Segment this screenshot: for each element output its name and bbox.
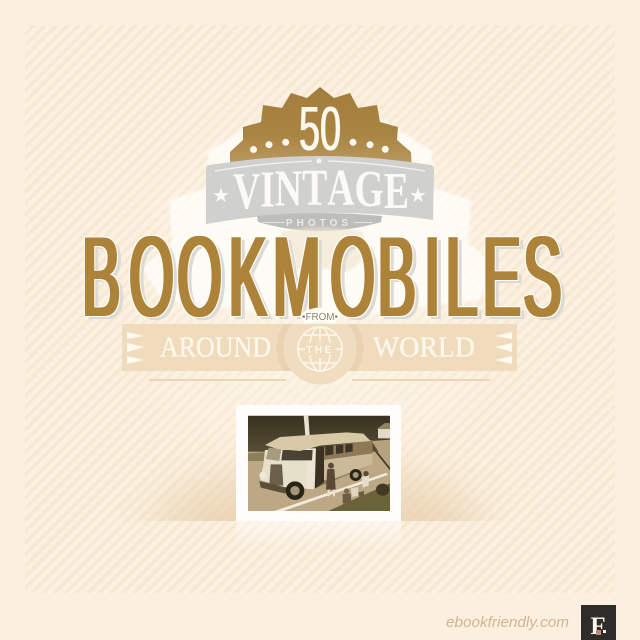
from tab: •FROM• <box>302 312 338 323</box>
bus side <box>315 440 373 488</box>
roadside verge <box>248 452 265 461</box>
photo reflection <box>236 521 401 549</box>
lawn <box>328 483 390 511</box>
site credit: ebookfriendly.com <box>446 614 569 631</box>
driveway <box>372 440 390 452</box>
brown sunburst <box>230 87 412 175</box>
house <box>377 423 390 438</box>
door <box>307 448 316 489</box>
logo: F <box>590 613 606 640</box>
lawn right <box>375 452 390 470</box>
photos word: PHOTOS <box>286 218 352 229</box>
faint swirl behind title <box>281 227 365 272</box>
from tab <box>300 308 340 324</box>
photo frame <box>236 405 401 521</box>
photos rules <box>263 222 373 224</box>
tree line <box>248 416 390 456</box>
icon: globe <box>298 327 342 371</box>
bumper <box>259 481 287 494</box>
shadow above photo base <box>143 457 493 521</box>
road <box>248 452 390 511</box>
underline right <box>352 379 490 381</box>
starburst behind badge <box>141 92 498 320</box>
photo: vintage bookmobile <box>248 416 390 511</box>
bus front <box>260 448 317 488</box>
underline left <box>149 379 286 381</box>
doorway <box>315 447 324 489</box>
dots row <box>250 139 388 152</box>
bus side band <box>323 453 373 480</box>
number 50: 50 <box>299 95 341 164</box>
left arrows <box>127 332 144 364</box>
badge <box>206 87 434 231</box>
banner rule <box>215 161 425 171</box>
cab window <box>281 450 313 460</box>
grille <box>269 464 283 486</box>
medallion inner <box>284 324 356 384</box>
photos tab <box>257 213 382 231</box>
librarian <box>326 463 336 496</box>
vintage word: VINTAGE <box>233 159 409 219</box>
logo <box>581 605 616 640</box>
title: bookmobiles: BOOKMOBILES <box>82 214 561 341</box>
ribbon <box>122 308 517 384</box>
roof <box>265 432 371 451</box>
rear wheel <box>350 469 362 481</box>
around word: AROUND <box>160 332 271 364</box>
children <box>343 471 369 504</box>
road line <box>274 473 388 511</box>
grey banner <box>206 156 434 231</box>
front wheel <box>286 481 304 500</box>
medallion outer ring <box>276 324 364 371</box>
windshield <box>266 448 281 461</box>
grey banner: ★ <box>409 183 427 207</box>
stars: ★ <box>212 183 230 207</box>
utility pole <box>304 416 310 436</box>
ribbon band <box>122 324 517 371</box>
shrub <box>376 484 389 496</box>
world word: WORLD <box>373 332 475 364</box>
the word: THE <box>306 345 334 356</box>
right arrows <box>495 332 512 364</box>
headlamp <box>259 472 266 479</box>
windows <box>325 444 353 456</box>
